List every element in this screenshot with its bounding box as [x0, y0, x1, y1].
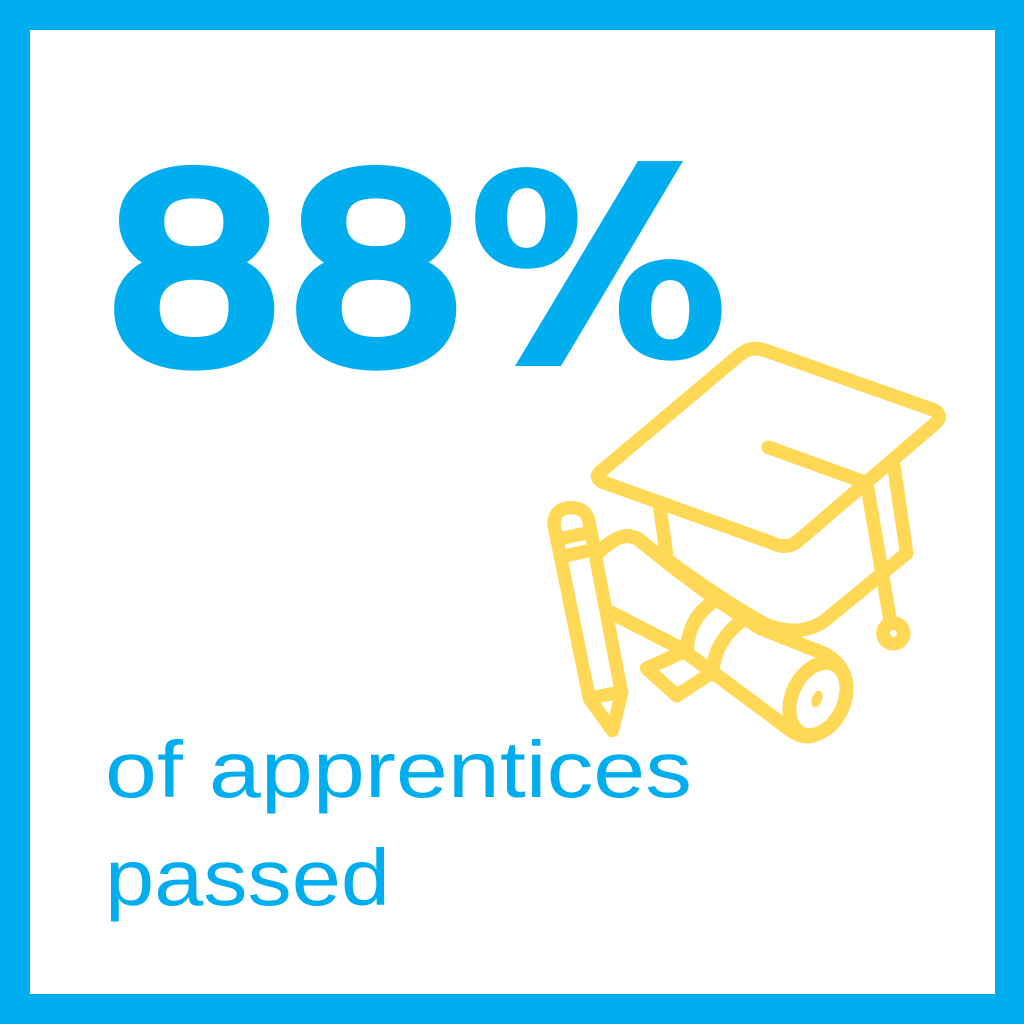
caption text: passed: [105, 833, 390, 922]
icon: tassel: [867, 487, 904, 644]
icon: cap centre line: [768, 447, 863, 482]
icon: diploma ribbon: [647, 653, 713, 696]
icon: cap base: [660, 467, 907, 630]
headline statistic: 88%: %: [467, 120, 730, 418]
icon: diploma scroll: [598, 536, 858, 744]
caption text: of apprentices: [105, 725, 692, 814]
icon: graduation cap, diploma and pencil: [554, 349, 939, 744]
icon: pencil: [554, 508, 622, 731]
headline statistic: 88%: 88: [110, 117, 474, 417]
caption text: [105, 725, 692, 922]
headline statistic: 88%: [110, 117, 730, 418]
icon: mortarboard top: [598, 349, 939, 546]
